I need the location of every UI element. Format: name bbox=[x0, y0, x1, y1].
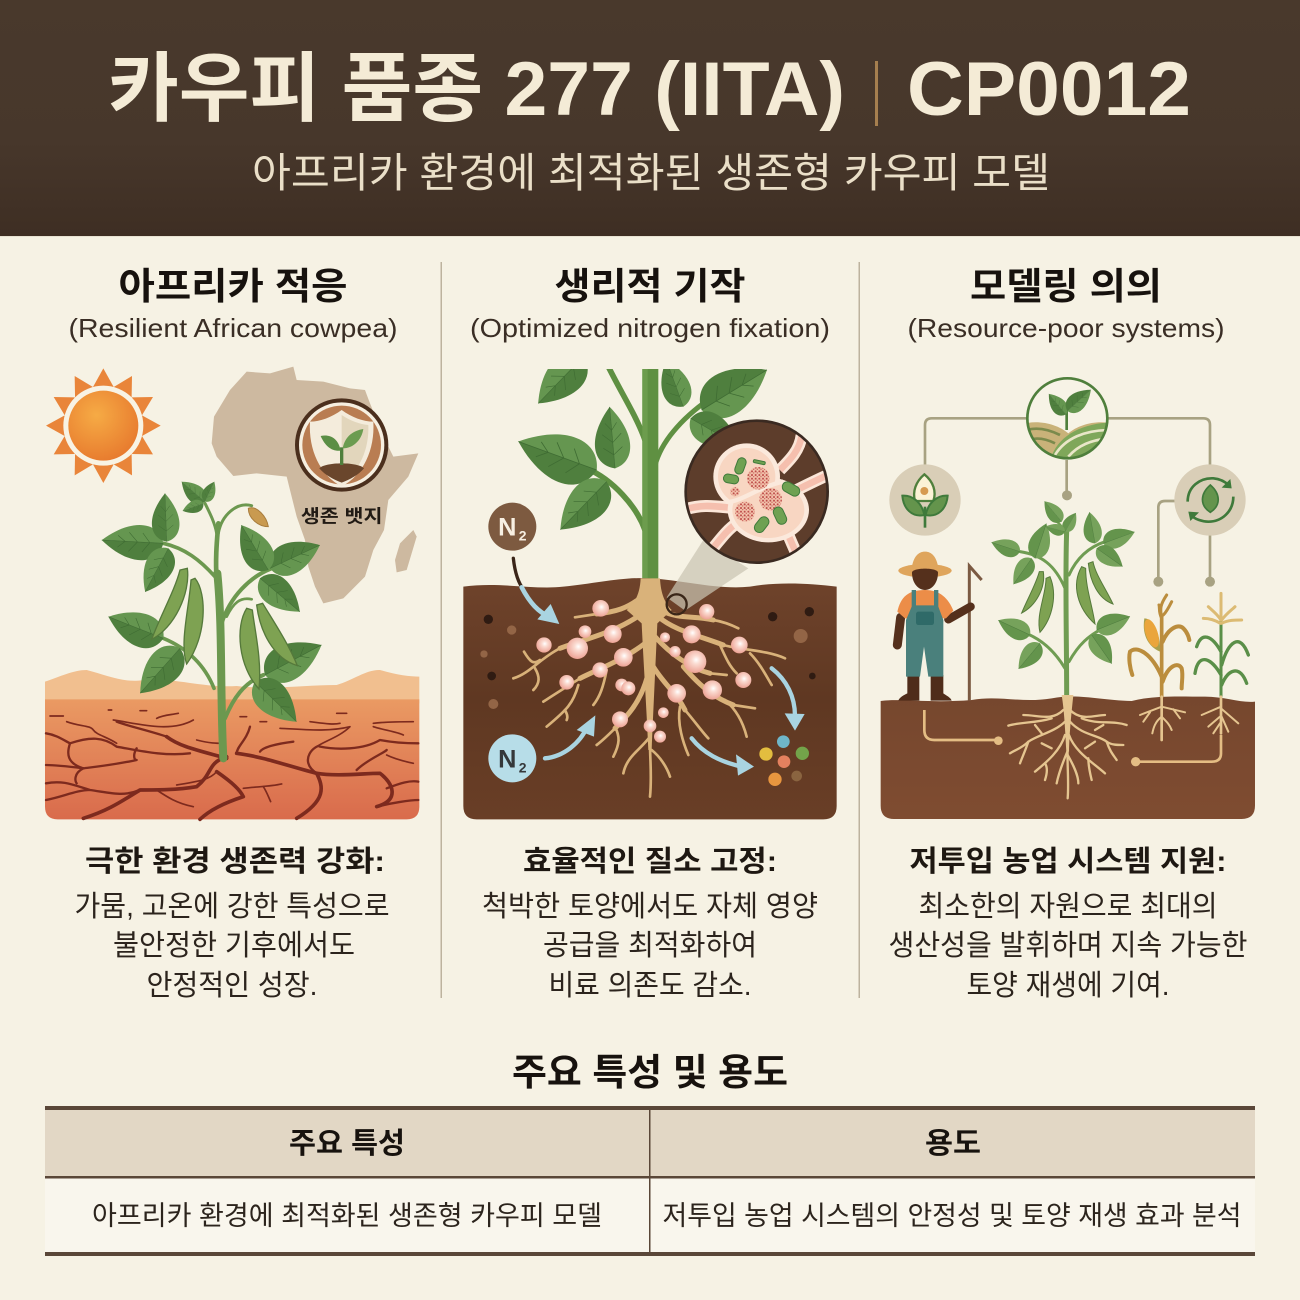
panel: physiological mechanism bbox=[463, 266, 837, 1002]
nitrogen bubble: brown: N bbox=[498, 514, 516, 542]
illustration: farming system bbox=[881, 378, 1255, 819]
badge label: 생존 뱃지 bbox=[301, 506, 382, 526]
icon: seed with leaves bbox=[889, 464, 961, 536]
icon: sun bbox=[46, 368, 161, 483]
magnifier cone bbox=[667, 540, 748, 611]
table header: key traits: 주요 특성 bbox=[289, 1127, 405, 1160]
plant with pods bbox=[101, 475, 330, 758]
root nodules bbox=[536, 600, 751, 743]
description: survival bbox=[74, 891, 390, 1002]
green corn plant bbox=[1195, 593, 1248, 733]
subheading: nitrogen fixation efficiency: 효율적인 질소 고정: bbox=[523, 845, 777, 878]
description: survival: 가뭄, 고온에 강한 특성으로 bbox=[74, 891, 390, 923]
nitrogen bubble: blue: N bbox=[498, 745, 516, 773]
table cell: uses: 저투입 농업 시스템의 안정성 및 토양 재생 효과 분석 bbox=[662, 1201, 1242, 1231]
heading: modelling significance: 모델링 의의 bbox=[970, 266, 1162, 307]
nitrogen bubble: brown: 2 bbox=[519, 528, 527, 544]
description: low-input systems: 토양 재생에 기여. bbox=[966, 970, 1170, 1002]
magnified root marker bbox=[667, 594, 687, 614]
table header: uses: 용도 bbox=[925, 1128, 981, 1160]
description: low-input systems: 생산성을 발휘하며 지속 가능한 bbox=[888, 929, 1248, 962]
soil particles bbox=[480, 607, 816, 709]
nitrogen bubble: blue: 2 bbox=[519, 759, 527, 775]
icon: seedling over fields bbox=[1025, 378, 1112, 462]
description: nitrogen fixation: 척박한 토양에서도 자체 영양 bbox=[482, 890, 818, 923]
farmer bbox=[897, 552, 982, 701]
subheading: low-input systems: 저투입 농업 시스템 지원: bbox=[910, 845, 1226, 878]
nitrogen bubble: blue bbox=[488, 734, 536, 782]
description: survival: 안정적인 성장. bbox=[146, 970, 318, 1002]
subheading: resilient cowpea: (Resilient African cowpea) bbox=[68, 313, 398, 343]
pods bbox=[152, 568, 297, 689]
illustration: plant on cracked soil bbox=[45, 367, 419, 819]
survival badge bbox=[295, 398, 388, 492]
soil connector lines bbox=[924, 710, 1221, 766]
subheading: nitrogen fixation: (Optimized nitrogen fixation) bbox=[470, 313, 830, 343]
subheading: survival: 극한 환경 생존력 강화: bbox=[85, 845, 385, 878]
header band bbox=[0, 0, 1300, 236]
map of Africa bbox=[212, 367, 418, 603]
connector lines bbox=[925, 418, 1210, 582]
central cowpea plant bbox=[989, 496, 1138, 695]
roots bbox=[513, 578, 785, 797]
panel: African adaptation bbox=[45, 266, 419, 1002]
product code: CP0012 bbox=[907, 47, 1191, 132]
arrow: nutrients down bbox=[772, 668, 805, 731]
table cell: key traits: 아프리카 환경에 최적화된 생존형 카우피 모델 bbox=[92, 1201, 602, 1231]
nutrient dots bbox=[759, 735, 809, 786]
magnified nodule bbox=[683, 420, 832, 563]
description: survival: 불안정한 기후에서도 bbox=[113, 930, 355, 962]
soil cracks bbox=[46, 710, 418, 819]
arrow: nitrogen to root bbox=[545, 715, 595, 758]
title: 카우피 품종 277 (IITA) bbox=[108, 47, 845, 132]
description: nitrogen fixation: 비료 의존도 감소. bbox=[548, 970, 752, 1002]
central roots bbox=[1008, 695, 1127, 798]
subheading: resource-poor systems: (Resource-poor systems) bbox=[908, 313, 1224, 343]
heading: African adaptation: 아프리카 적응 bbox=[118, 266, 348, 307]
table: key traits and uses bbox=[45, 1106, 1255, 1256]
distant dunes bbox=[45, 670, 419, 703]
description: low-input systems bbox=[888, 890, 1248, 1002]
illustration: root nodules in soil bbox=[463, 344, 837, 819]
section title: 주요 특성 및 용도 bbox=[512, 1052, 788, 1093]
connector dots bbox=[1062, 490, 1215, 587]
panel: modelling significance bbox=[881, 266, 1255, 1002]
soil bbox=[463, 578, 837, 819]
stems bbox=[163, 503, 272, 758]
arrow: nutrients release bbox=[692, 738, 754, 776]
description: nitrogen fixation bbox=[482, 890, 818, 1002]
subtitle: 아프리카 환경에 최적화된 생존형 카우피 모델 bbox=[252, 150, 1050, 196]
leaves bbox=[101, 523, 164, 561]
description: low-input systems: 최소한의 자원으로 최대의 bbox=[918, 890, 1218, 923]
cracked soil bbox=[45, 699, 419, 819]
icon: recycling leaf bbox=[1174, 464, 1246, 536]
yellow corn plant bbox=[1129, 595, 1189, 740]
arrow: nitrogen entering soil bbox=[513, 558, 559, 624]
description: nitrogen fixation: 공급을 최적화하여 bbox=[543, 929, 757, 962]
flower bud bbox=[248, 508, 268, 527]
heading: physiological mechanism: 생리적 기작 bbox=[554, 266, 746, 307]
soil bbox=[881, 696, 1255, 819]
nitrogen bubble: brown bbox=[488, 503, 536, 551]
plant top bbox=[510, 344, 778, 580]
title divider bbox=[875, 61, 878, 126]
